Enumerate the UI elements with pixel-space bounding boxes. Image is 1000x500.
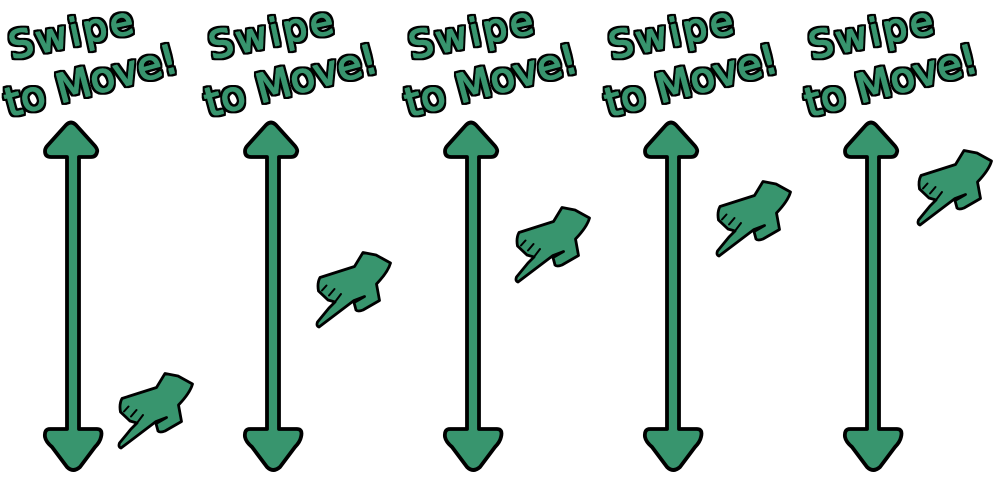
heading: Swipe to Move!: Swipe — [405, 0, 537, 68]
arrow: vertical double-headed — [645, 122, 702, 470]
heading: Swipe to Move!: to Move! — [600, 36, 783, 127]
heading: Swipe to Move!: to Move! — [200, 36, 383, 127]
icon: pointing hand — [317, 252, 390, 327]
arrow: vertical double-headed — [445, 122, 502, 470]
heading: Swipe to Move!: to Move! — [0, 36, 183, 127]
panel 3 — [400, 0, 590, 470]
icon: pointing hand — [717, 182, 790, 256]
heading: Swipe to Move!: to Move! — [800, 36, 983, 127]
panel 5 — [800, 0, 992, 470]
heading: Swipe to Move!: to Move! — [400, 36, 583, 127]
icon: pointing hand — [918, 150, 992, 225]
icon: pointing hand — [516, 208, 590, 282]
icon: pointing hand — [119, 374, 192, 448]
panel 2 — [200, 0, 390, 470]
panel 1 — [0, 0, 193, 470]
panel 4 — [600, 0, 790, 470]
heading: Swipe to Move!: Swipe — [205, 0, 337, 68]
heading: Swipe to Move!: Swipe — [805, 0, 937, 68]
arrow: vertical double-headed — [245, 122, 302, 470]
heading: Swipe to Move!: Swipe — [5, 0, 137, 68]
arrow: vertical double-headed — [845, 122, 902, 470]
heading: Swipe to Move!: Swipe — [605, 0, 737, 68]
arrow: vertical double-headed — [45, 122, 102, 470]
